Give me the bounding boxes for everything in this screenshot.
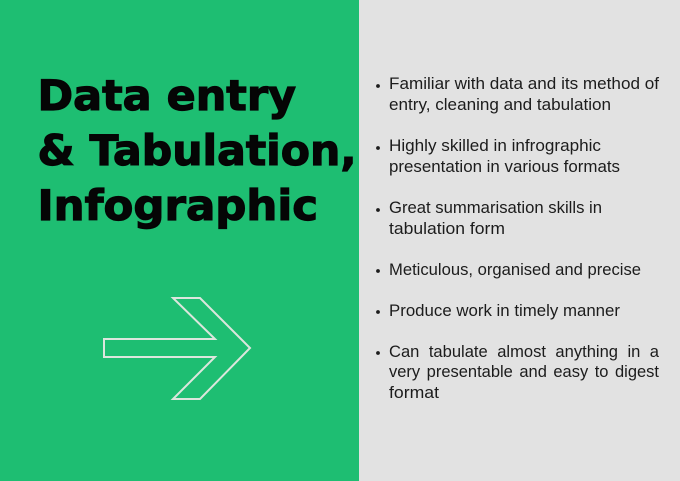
list item: summarisation: tabulation form	[389, 219, 505, 238]
list item: infographic skill: Highly skilled in infrographic	[389, 136, 601, 155]
list item: data familiarity: Familiar with data and its method of	[389, 74, 659, 93]
list item: meticulous: Meticulous, organised and precise	[389, 260, 641, 279]
list item: tabulate anything: Can tabulate almost anything in a	[389, 342, 660, 361]
list item: summarisation: Great summarisation skills in	[389, 198, 602, 217]
list item: summarisation	[376, 198, 602, 238]
icon: outlined arrow	[104, 298, 250, 399]
title: Data entry	[38, 71, 296, 120]
list item: infographic skill: presentation in various formats	[389, 157, 620, 176]
bullet list	[376, 74, 660, 402]
list item: infographic skill	[376, 136, 620, 176]
title: & Tabulation,	[38, 126, 356, 175]
list item: data familiarity	[376, 74, 659, 114]
panel: grey right background	[359, 0, 680, 481]
title: Infographic	[38, 181, 318, 230]
title	[38, 71, 356, 230]
panel: green left background	[0, 0, 359, 481]
list item: tabulate anything: format	[389, 383, 439, 402]
list item: timely work: Produce work in timely manner	[389, 301, 620, 320]
list item: data familiarity: entry, cleaning and tabulation	[389, 95, 611, 114]
list item: tabulate anything	[376, 342, 660, 402]
list item: tabulate anything: very presentable and easy to digest	[389, 362, 659, 381]
